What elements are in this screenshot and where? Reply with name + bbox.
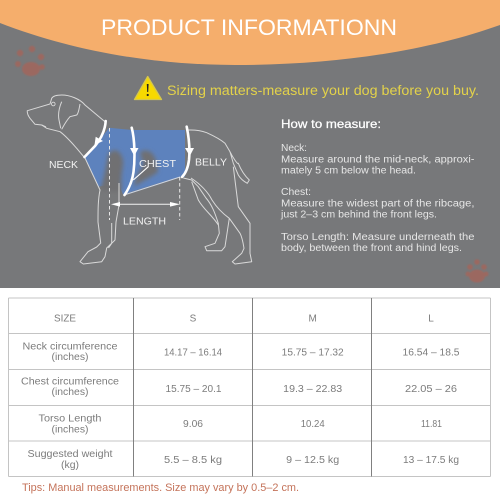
- row: torso length: (inches): [52, 425, 88, 436]
- how to measure text block: [280, 117, 475, 254]
- neck measuring band: [84, 121, 106, 157]
- row: suggested weight: (kg): [61, 460, 79, 471]
- table text: [21, 314, 460, 471]
- label: chest: CHEST: [139, 158, 177, 170]
- label: belly: BELLY: [195, 156, 227, 168]
- harness cutout: chest patch: [134, 151, 158, 187]
- belly arrow: [185, 148, 194, 156]
- icon: paw print upper left: [15, 46, 45, 76]
- row: chest circumference: 19.3 – 22.83: [283, 384, 343, 395]
- row: size: [54, 314, 434, 325]
- dog hind leg outline: [183, 167, 252, 264]
- row: torso length: Torso Length: [38, 414, 102, 425]
- row: neck circumference: (inches): [52, 352, 88, 363]
- row: neck circumference: 14.17 – 16.14: [164, 348, 222, 359]
- table grid: [8, 298, 490, 476]
- torso instruction line one: Torso Length: Measure underneath the: [281, 232, 475, 243]
- dog eye: [52, 102, 55, 106]
- warning text: Sizing matters-measure your dog before you buy.: [167, 83, 479, 98]
- length arrow: [111, 202, 180, 207]
- row: suggested weight: 9 – 12.5 kg: [286, 455, 339, 466]
- row: size: S: [190, 314, 197, 325]
- dog front leg outline: [80, 158, 119, 264]
- how to measure heading: How to measure:: [281, 117, 381, 131]
- row: neck circumference: [22, 342, 460, 363]
- row: neck circumference: 15.75 – 17.32: [282, 348, 344, 359]
- neck heading: Neck:: [281, 143, 307, 154]
- row: neck circumference: 16.54 – 18.5: [402, 348, 460, 359]
- icon: paw print lower right: [466, 259, 488, 282]
- chest heading: Chest:: [281, 187, 311, 198]
- row: chest circumference: Chest circumference: [21, 376, 119, 387]
- dog back and tail outline: [186, 130, 249, 183]
- row: chest circumference: (inches): [52, 387, 88, 398]
- row: chest circumference: [21, 376, 457, 398]
- neck instruction line one: Measure around the mid-neck, approxi-: [281, 154, 474, 165]
- row: chest circumference: 15.75 – 20.1: [166, 384, 222, 395]
- chest measuring band: [124, 128, 134, 195]
- row: size: SIZE: [54, 314, 76, 325]
- row: suggested weight: 13 – 17.5 kg: [403, 455, 459, 466]
- row: suggested weight: 5.5 – 8.5 kg: [164, 455, 222, 466]
- belly measuring band: [182, 127, 189, 177]
- orange header banner: [0, 0, 500, 65]
- row: torso length: 10.24: [301, 419, 325, 430]
- size table: [8, 298, 490, 476]
- title: PRODUCT INFORMATIONN: [101, 15, 397, 40]
- row: size: M: [309, 314, 317, 325]
- row: chest circumference: 22.05 – 26: [405, 384, 457, 395]
- chest instruction line two: just 2–3 cm behind the front legs.: [280, 210, 437, 221]
- row: torso length: 9.06: [183, 419, 203, 430]
- chest instruction line one: Measure the widest part of the ribcage,: [281, 199, 474, 210]
- row: size: L: [428, 314, 434, 325]
- icon: warning triangle: [134, 76, 162, 100]
- row: suggested weight: Suggested weight: [28, 449, 113, 460]
- row: torso length: [38, 414, 442, 436]
- tips footnote: Tips: Manual measurements. Size may vary by 0.5–2 cm.: [22, 482, 299, 494]
- length guide lines: [110, 128, 180, 220]
- dog ear and eye: [42, 102, 80, 129]
- gray upper panel: [0, 0, 500, 288]
- chest arrow: [130, 148, 138, 156]
- neck instruction line two: mately 5 cm below the head.: [281, 165, 416, 176]
- dog harness: [85, 128, 185, 195]
- torso instruction line two: body, between the front and hind legs.: [281, 243, 462, 254]
- dog head and neck outline: [27, 95, 105, 157]
- harness cutout: front leg: [100, 150, 123, 192]
- row: torso length: 11.81: [421, 419, 442, 430]
- neck arrow: [94, 137, 103, 145]
- label: neck: NECK: [49, 159, 78, 171]
- harness lower edge: [124, 177, 180, 195]
- label: length: LENGTH: [123, 216, 166, 228]
- row: suggested weight: [28, 449, 459, 471]
- dog measuring diagram: [27, 95, 252, 264]
- chest pointer line: [133, 167, 148, 180]
- row: neck circumference: Neck circumference: [22, 342, 118, 352]
